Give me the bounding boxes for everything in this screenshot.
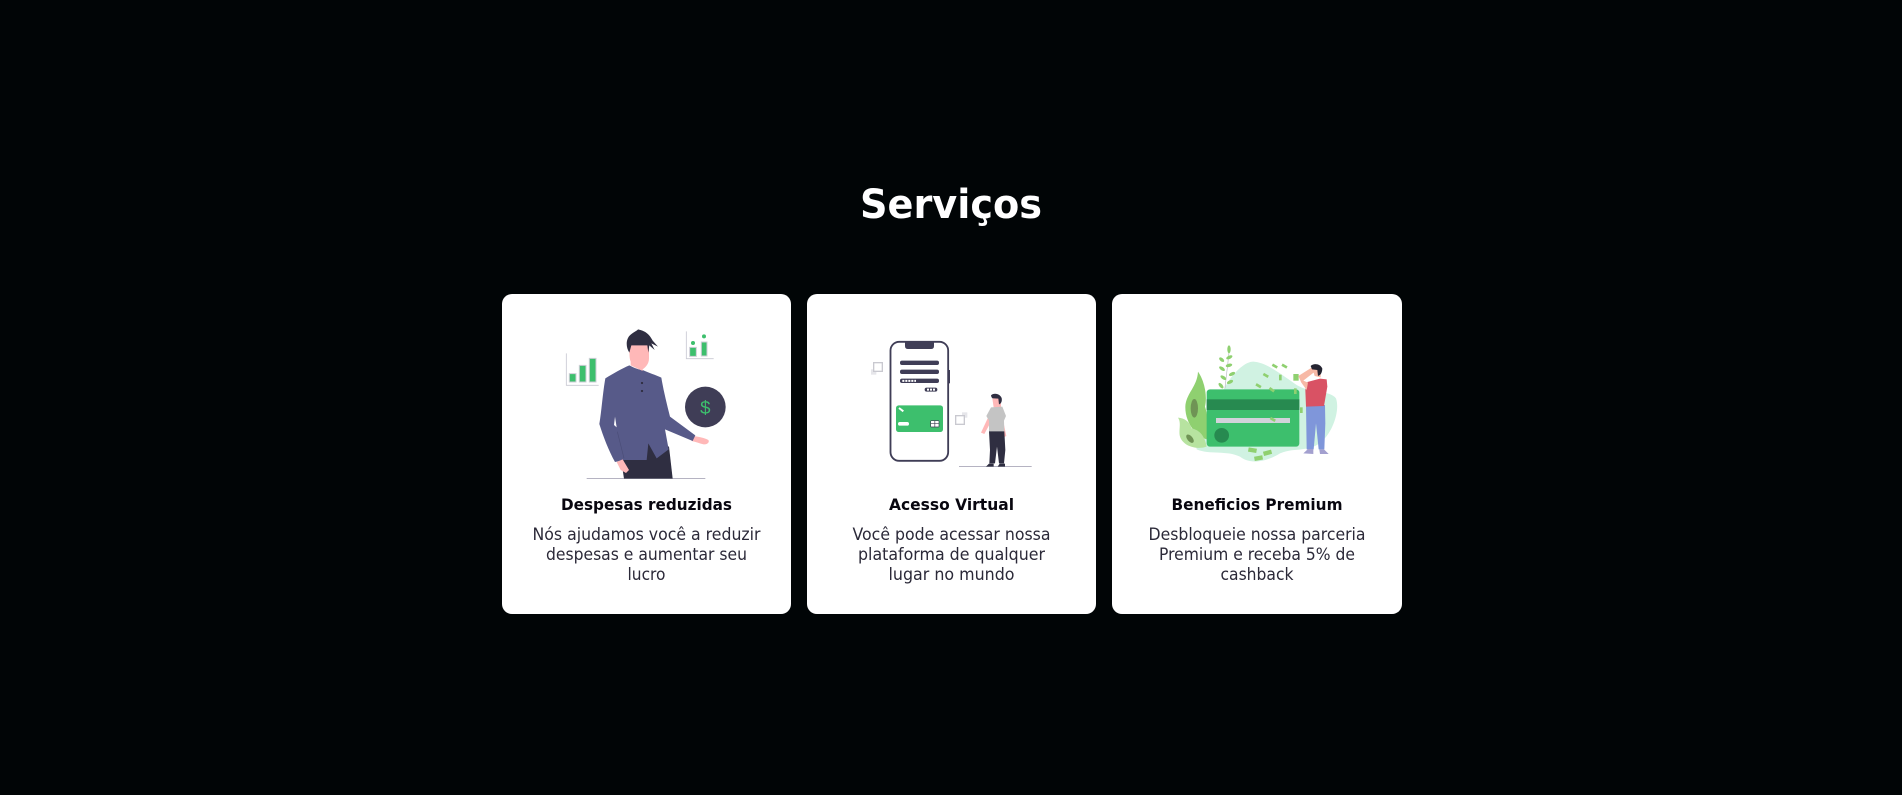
phone green card	[896, 405, 943, 432]
shirt buttons	[641, 382, 643, 384]
neck and face	[629, 345, 649, 371]
flying banknotes	[1248, 364, 1303, 461]
trousers	[1306, 405, 1325, 449]
shoes	[1303, 449, 1329, 454]
plant	[1218, 345, 1236, 389]
leaves	[1185, 372, 1210, 440]
background blob	[1196, 362, 1337, 461]
title: Serviços	[860, 182, 1042, 228]
card text: Você pode acessar nossa	[852, 525, 1050, 544]
card text: cashback	[1220, 565, 1294, 584]
card text: Premium e receba 5% de	[1159, 545, 1355, 564]
phone text lines	[900, 361, 939, 365]
illustration: man with coin and charts: $	[700, 397, 711, 418]
trousers	[989, 431, 1005, 463]
chart right	[686, 331, 714, 359]
card text: lucro	[628, 565, 666, 584]
card text: plataforma de qualquer	[858, 545, 1045, 564]
hair	[627, 329, 658, 353]
illustration: credit card and person	[1178, 345, 1337, 461]
card text	[852, 525, 1050, 584]
arms	[1298, 367, 1316, 390]
card text: Desbloqueie nossa parceria	[1148, 525, 1366, 544]
ground line	[959, 465, 1032, 468]
card text: lugar no mundo	[888, 565, 1014, 584]
hair	[991, 394, 1002, 404]
card text: despesas e aumentar seu	[546, 545, 747, 564]
illustration: man with coin and charts	[566, 329, 726, 479]
card text: Nós ajudamos você a reduzir	[532, 525, 761, 544]
t-shirt	[986, 407, 1006, 432]
panel: beneficios premium	[1112, 294, 1402, 614]
shirt	[599, 365, 695, 462]
panel: acesso virtual	[807, 294, 1096, 614]
hand right	[692, 436, 709, 444]
card heading: Despesas reduzidas	[561, 495, 732, 514]
head	[1312, 367, 1321, 377]
pants	[621, 442, 673, 479]
panel: despesas reduzidas	[502, 294, 791, 614]
shoes	[986, 464, 1005, 467]
card heading: Beneficios Premium	[1172, 495, 1342, 514]
card text	[532, 525, 761, 584]
decorative squares	[871, 369, 876, 375]
chart left	[566, 353, 599, 385]
card text	[1148, 525, 1366, 584]
shirt	[1305, 379, 1327, 407]
phone	[890, 342, 948, 461]
icon: dollar coin	[685, 387, 726, 427]
illustration: phone and person	[871, 342, 1032, 467]
arms and face	[981, 418, 1006, 437]
ground line	[587, 477, 705, 480]
card heading: Acesso Virtual	[889, 495, 1014, 514]
hand left	[617, 459, 629, 473]
credit card	[1207, 389, 1299, 447]
